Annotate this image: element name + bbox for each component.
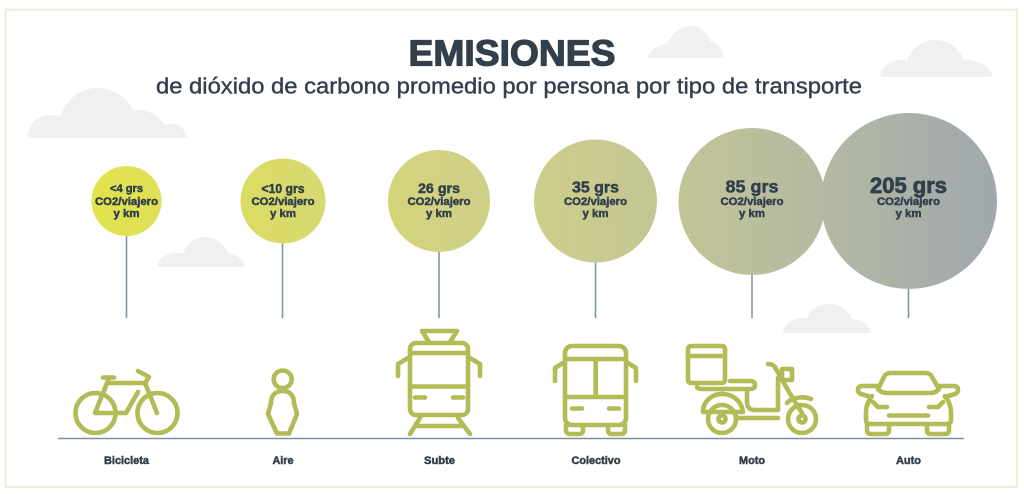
- data point: Moto: [678, 128, 826, 318]
- data point: Moto: CO2/viajero: [720, 196, 784, 208]
- cloud: lower left: [157, 237, 245, 267]
- data point: Subte: CO2/viajero: [408, 196, 471, 208]
- subtitle: de dióxido de carbono promedio por persona por tipo de transporte: [156, 74, 862, 98]
- data point: Auto: [821, 113, 997, 318]
- data point: Colectivo: 35 grs: [572, 180, 619, 196]
- data point: Colectivo: y km: [582, 208, 609, 220]
- data point: Bicicleta: y km: [114, 208, 140, 220]
- data point: Subte: 26 grs: [418, 180, 460, 196]
- label: Moto: Moto: [739, 455, 765, 467]
- data point: Aire: CO2/viajero: [252, 196, 315, 208]
- cloud: top left: [28, 88, 187, 138]
- data point: Bicicleta: <4 grs: [110, 183, 143, 195]
- icon: car: [858, 373, 958, 434]
- icon: bus: [555, 346, 636, 434]
- data point: Auto: 205 grs: [870, 173, 947, 198]
- data point: Aire: y km: [270, 208, 296, 220]
- label: Bicicleta: Bicicleta: [104, 455, 150, 467]
- icon: person: [268, 370, 297, 434]
- icon: bicycle: [76, 371, 178, 433]
- data point: Bicicleta: CO2/viajero: [95, 196, 158, 208]
- data point: Auto: y km: [896, 208, 922, 220]
- label: Colectivo: Colectivo: [572, 455, 621, 467]
- icon: tram: [398, 331, 480, 434]
- data point: Aire: <10 grs: [262, 181, 304, 196]
- data point: Subte: y km: [426, 208, 452, 220]
- data point: Subte: [388, 150, 490, 318]
- data point: Moto: 85 grs: [726, 176, 779, 196]
- data point: Aire: [240, 158, 326, 318]
- label: Auto: Auto: [896, 455, 921, 467]
- cloud: lower right: [783, 304, 871, 333]
- data point: Colectivo: CO2/viajero: [564, 196, 627, 208]
- data point: Auto: CO2/viajero: [877, 196, 940, 208]
- cloud: beside title: [647, 26, 724, 58]
- data point: Colectivo: [534, 140, 657, 318]
- label: Subte: Subte: [424, 455, 455, 467]
- icon: scooter with delivery box: [688, 346, 816, 433]
- cloud: top right: [880, 40, 993, 77]
- data point: Bicicleta: [92, 166, 162, 318]
- data point: Moto: y km: [739, 208, 765, 220]
- title: EMISIONES: [408, 33, 616, 74]
- ground line: [58, 438, 964, 440]
- label: Aire: Aire: [272, 455, 294, 467]
